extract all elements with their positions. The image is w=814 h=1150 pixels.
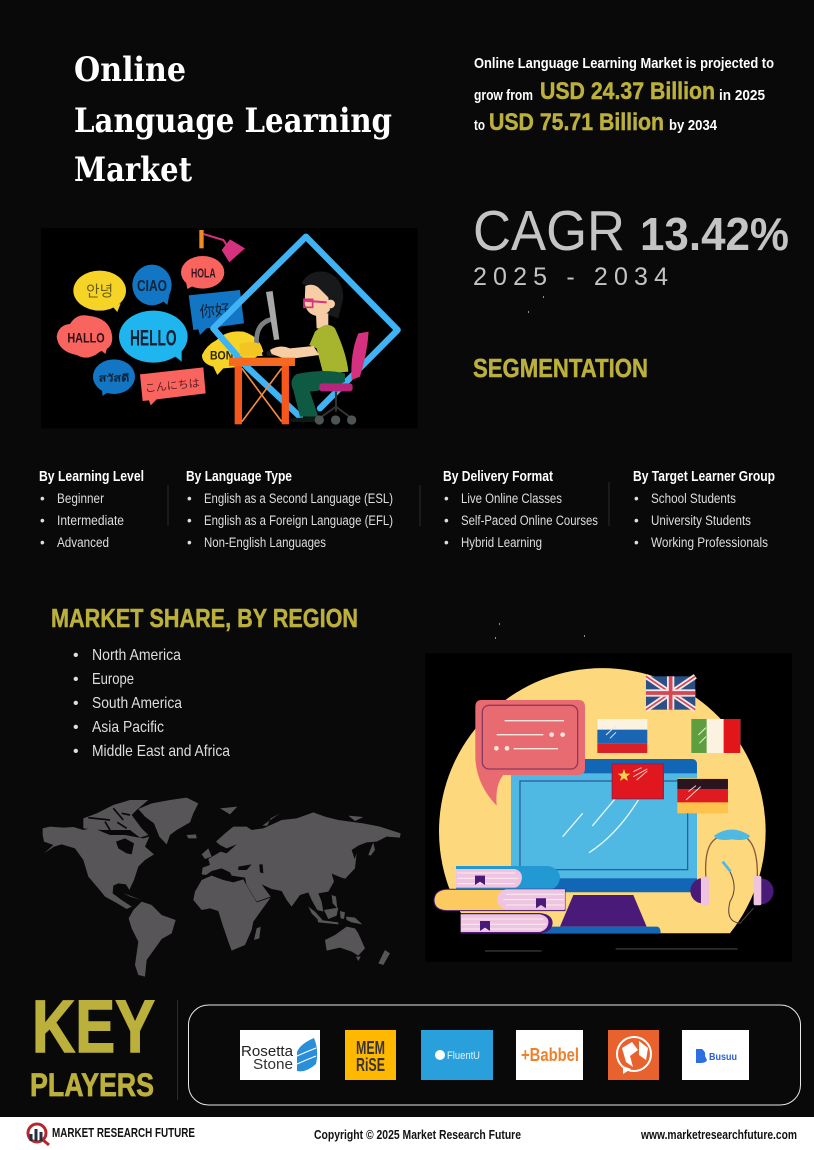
market projection text: USD 24.37 Billion bbox=[540, 78, 715, 105]
icon: desk lamp bbox=[199, 230, 245, 262]
character: learner at desk bbox=[270, 271, 348, 422]
key players heading: PLAYERS bbox=[30, 1067, 154, 1103]
speech bubble: hola: HOLA bbox=[191, 266, 216, 280]
logo: Babbel bbox=[516, 1030, 583, 1080]
market projection text: to bbox=[474, 117, 485, 134]
CAGR callout: CAGR bbox=[473, 199, 625, 263]
world map bbox=[43, 798, 401, 977]
market share heading: MARKET SHARE, BY REGION bbox=[51, 603, 358, 633]
headphones bbox=[690, 829, 774, 923]
market projection text: by 2034 bbox=[669, 117, 718, 134]
chair bbox=[315, 332, 369, 425]
segmentation: by language type bbox=[186, 468, 393, 550]
region list: • bbox=[73, 719, 79, 736]
speech bubble: sawasdee: สวัสดี bbox=[99, 373, 129, 385]
icon: market research future logo bbox=[28, 1124, 49, 1145]
logo: Busuu bbox=[682, 1030, 749, 1080]
title: Language Learning bbox=[74, 101, 392, 141]
speech bubble: nihao: 你好 bbox=[199, 302, 231, 321]
segmentation: by learning level: Advanced bbox=[57, 535, 109, 550]
region list: • bbox=[73, 695, 79, 712]
segmentation: by target learner group bbox=[633, 468, 775, 550]
logo: Rosetta Stone bbox=[240, 1030, 320, 1080]
logo: Babbel: +Babbel bbox=[521, 1045, 579, 1065]
icon: computer monitor bbox=[239, 291, 283, 356]
segmentation: by learning level: • bbox=[40, 491, 45, 506]
segmentation: by learning level: Intermediate bbox=[57, 513, 124, 528]
region list: South America bbox=[92, 695, 182, 712]
segmentation: by delivery format: By Delivery Format bbox=[443, 468, 553, 485]
region list: North America bbox=[92, 647, 181, 664]
flag: Germany bbox=[677, 778, 728, 813]
speech bubble: bonjour bbox=[202, 331, 263, 375]
speech bubble: ciao bbox=[132, 265, 172, 305]
illustration: language learning computer bbox=[425, 653, 792, 962]
CAGR callout bbox=[473, 199, 789, 291]
speech bubble: nihao bbox=[189, 290, 244, 335]
key players heading: KEY bbox=[32, 985, 155, 1068]
title: Online bbox=[74, 50, 186, 90]
speech bubble: konnichiwa: こんにちは bbox=[144, 376, 200, 395]
segmentation: by target learner group: By Target Learner Group bbox=[633, 468, 775, 485]
footer bar: MARKET RESEARCH FUTURE bbox=[52, 1126, 195, 1140]
key players panel bbox=[188, 1005, 800, 1105]
segmentation: by learning level: • bbox=[40, 513, 45, 528]
region list: Middle East and Africa bbox=[92, 743, 230, 760]
diamond frame bbox=[213, 237, 398, 417]
illustration: person learning languages bbox=[41, 228, 418, 428]
segmentation: by learning level: Beginner bbox=[57, 491, 104, 506]
segmentation: by target learner group: University Students bbox=[651, 513, 751, 528]
speech bubble: hola bbox=[181, 256, 224, 289]
region list: Europe bbox=[92, 671, 134, 688]
yellow circle backdrop bbox=[439, 668, 766, 933]
segmentation: by language type: • bbox=[187, 535, 192, 550]
speech bubble: konnichiwa bbox=[140, 367, 206, 405]
segmentation: by learning level: By Learning Level bbox=[39, 468, 144, 485]
speech bubble: annyeong: 안녕 bbox=[86, 283, 113, 300]
flag: China bbox=[612, 764, 663, 799]
market projection text: USD 75.71 Billion bbox=[489, 109, 664, 136]
speech bubble: hallo: HALLO bbox=[67, 330, 105, 346]
segmentation: by target learner group: • bbox=[634, 535, 639, 550]
segmentation: by language type: • bbox=[187, 513, 192, 528]
segmentation: by language type: English as a Foreign Language (EFL) bbox=[204, 513, 393, 528]
segmentation: by delivery format: • bbox=[444, 513, 449, 528]
segmentation heading: SEGMENTATION bbox=[473, 353, 648, 383]
flag: Russia bbox=[597, 719, 647, 753]
logo: Rosetta Stone: Rosetta bbox=[241, 1044, 294, 1060]
logo: FluentU: FluentU bbox=[447, 1050, 480, 1062]
desk bbox=[229, 358, 295, 424]
CAGR callout: 13.42% bbox=[640, 208, 789, 260]
footer bar bbox=[0, 1117, 814, 1150]
segmentation: by language type: English as a Second Language (ESL) bbox=[204, 491, 393, 506]
region list: • bbox=[73, 671, 79, 688]
segmentation: by target learner group: Working Professionals bbox=[651, 535, 768, 550]
region list bbox=[73, 647, 230, 760]
segmentation: by learning level: • bbox=[40, 535, 45, 550]
flag: Italy bbox=[691, 719, 740, 753]
segmentation: by target learner group: • bbox=[634, 513, 639, 528]
segmentation: by language type: • bbox=[187, 491, 192, 506]
segmentation: by delivery format: • bbox=[444, 535, 449, 550]
speech bubble: hello: HELLO bbox=[130, 325, 177, 350]
logo: Busuu: Busuu bbox=[709, 1052, 737, 1063]
monitor bbox=[511, 759, 697, 934]
segmentation: by target learner group: • bbox=[634, 491, 639, 506]
region list: • bbox=[73, 647, 79, 664]
speech bubble: ciao: CIAO bbox=[137, 278, 167, 295]
books bbox=[434, 866, 565, 934]
speech bubble: hello bbox=[119, 311, 188, 363]
segmentation: by delivery format: Live Online Classes bbox=[461, 491, 562, 506]
segmentation: by delivery format: Hybrid Learning bbox=[461, 535, 542, 550]
speech bubble: bonjour: BON bbox=[210, 348, 233, 362]
CAGR callout: 2025 - 2034 bbox=[473, 263, 668, 291]
footer bar: Copyright © 2025 Market Research Future bbox=[314, 1128, 521, 1142]
segmentation: by target learner group: School Students bbox=[651, 491, 736, 506]
speech bubble: annyeong bbox=[73, 271, 126, 312]
logo: Memrise: RiSE bbox=[356, 1055, 385, 1075]
title bbox=[74, 50, 392, 190]
region list: Asia Pacific bbox=[92, 719, 164, 736]
logo: Memrise bbox=[345, 1030, 396, 1080]
key players heading bbox=[30, 985, 155, 1103]
market projection text: in 2025 bbox=[719, 87, 765, 104]
segmentation: by delivery format bbox=[443, 468, 598, 550]
logo: Mondly bbox=[608, 1030, 659, 1080]
flag: UK bbox=[646, 676, 695, 710]
market projection text: grow from bbox=[474, 87, 533, 104]
segmentation: by language type: Non-English Languages bbox=[204, 535, 326, 550]
market projection text: Online Language Learning Market is projected to bbox=[474, 55, 774, 72]
logo: Memrise: MEM bbox=[356, 1038, 385, 1058]
logo: Rosetta Stone: Stone bbox=[253, 1057, 293, 1073]
title: Market bbox=[74, 150, 192, 190]
market projection text bbox=[474, 55, 774, 136]
speech bubble bbox=[475, 700, 585, 806]
speech bubble: hallo bbox=[57, 315, 112, 358]
segmentation: by delivery format: • bbox=[444, 491, 449, 506]
region list: • bbox=[73, 743, 79, 760]
segmentation: by delivery format: Self-Paced Online Courses bbox=[461, 513, 598, 528]
speech bubble: sawasdee bbox=[93, 359, 135, 396]
segmentation: by language type: By Language Type bbox=[186, 468, 292, 485]
segmentation: by learning level bbox=[39, 468, 144, 550]
logo: FluentU bbox=[421, 1030, 493, 1080]
